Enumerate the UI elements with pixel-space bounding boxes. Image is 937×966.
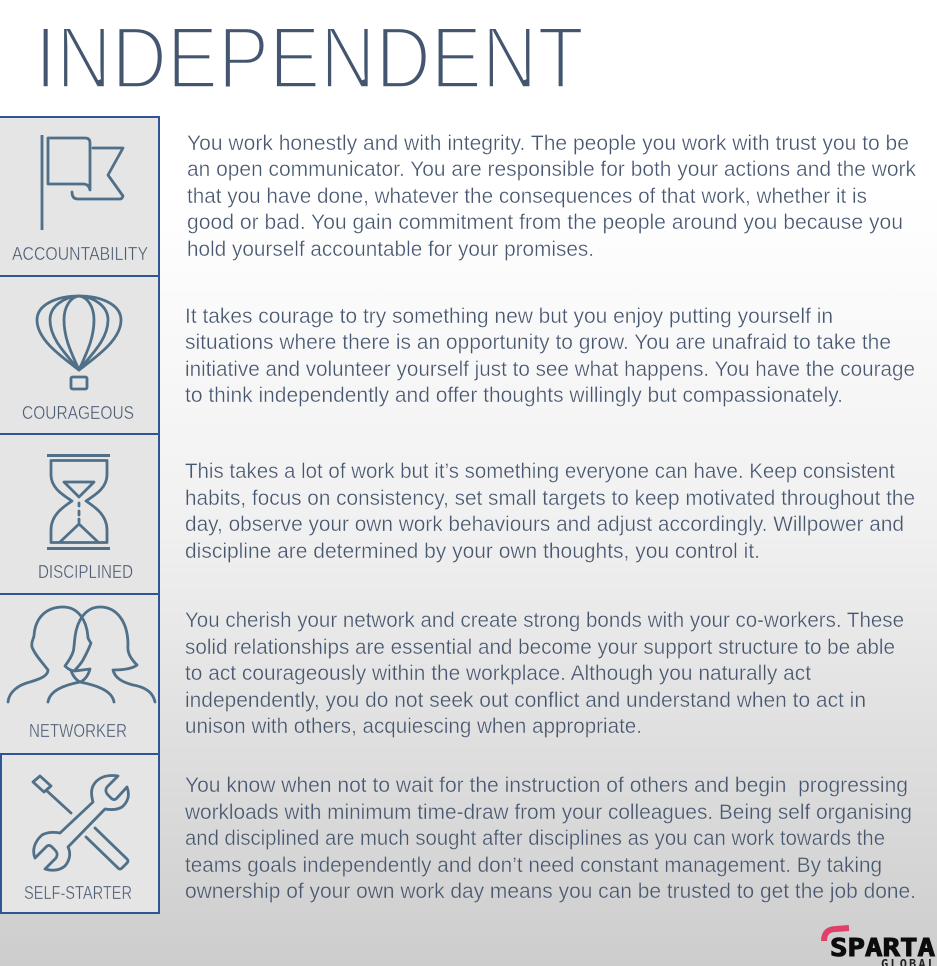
panel: accountability [0,117,159,276]
text block: courageous: It takes courage to try something new but you enjoy putting yourself in [185,305,833,328]
text block: courageous: initiative and volunteer yourself just to see what happens. You have the courage [185,358,915,381]
icon: balloon [37,296,121,389]
panel: courageous [0,276,159,434]
text block: networker: independently, you do not seek out conflict and understand when to act in [185,689,866,712]
text block: disciplined: day, observe your own work behaviours and adjust accordingly. Willpower and [185,513,904,536]
text block: self-starter: ownership of your own work day means you can be trusted to get the job done. [185,880,916,903]
text block: accountability: You work honestly and with integrity. The people you work with trust you to be [187,132,909,155]
label: networker: NETWORKER [29,721,127,741]
panel: self-starter [1,754,159,913]
text block: disciplined [185,460,915,563]
text block: self-starter: workloads with minimum time-draw from your colleagues. Being self organising [184,801,912,824]
text block: networker: unison with others, acquiescing when appropriate. [185,715,642,738]
text block: accountability: that you have done, whatever the consequences of that work, whether it is [187,185,867,208]
text block: disciplined: discipline are determined by your own thoughts, you control it. [185,540,760,563]
text block: accountability: hold yourself accountable for your promises. [187,238,594,261]
logo: Sparta Global [824,928,935,966]
text block: self-starter: teams goals independently and don’t need constant management. By taking [185,854,882,877]
text block: accountability: good or bad. You gain commitment from the people around you because you [187,211,903,234]
title: INDEPENDENT [35,8,584,107]
text block: accountability: an open communicator. You are responsible for both your actions and the work [187,158,916,181]
panel: disciplined [0,434,159,594]
logo: Sparta Global: SPARTA [830,933,935,962]
icon: hourglass [47,456,110,548]
label: courageous: COURAGEOUS [22,403,134,423]
label: accountability: ACCOUNTABILITY [12,244,148,264]
text block: accountability [187,132,916,261]
label: self-starter: SELF-STARTER [24,883,132,903]
text block: disciplined: This takes a lot of work but it’s something everyone can have. Keep consistent [185,460,895,483]
text block: networker [185,609,904,738]
text block: self-starter: You know when not to wait for the instruction of others and begin progressing [185,774,908,797]
icon: wrench and screwdriver [33,775,128,870]
text block: disciplined: habits, focus on consistency, set small targets to keep motivated throughout the [185,487,915,510]
text block: courageous: to think independently and offer thoughts willingly but compassionately. [185,384,843,407]
text block: self-starter: and disciplined are much sought after disciplines as you can work towards the [185,827,885,850]
panel: networker [0,594,159,754]
text block: courageous: situations where there is an opportunity to grow. You are unafraid to take the [185,331,891,354]
text block: courageous [185,305,915,407]
text block: networker: You cherish your network and create strong bonds with your co-workers. These [185,609,904,632]
icon: flag [42,135,123,230]
text block: networker: solid relationships are essential and become your support structure to be able [185,636,895,659]
text block: networker: to act courageously within the workplace. Although you naturally act [185,662,811,685]
label: disciplined: DISCIPLINED [38,562,133,582]
icon: two people [8,607,155,702]
text block: self-starter [184,774,916,903]
